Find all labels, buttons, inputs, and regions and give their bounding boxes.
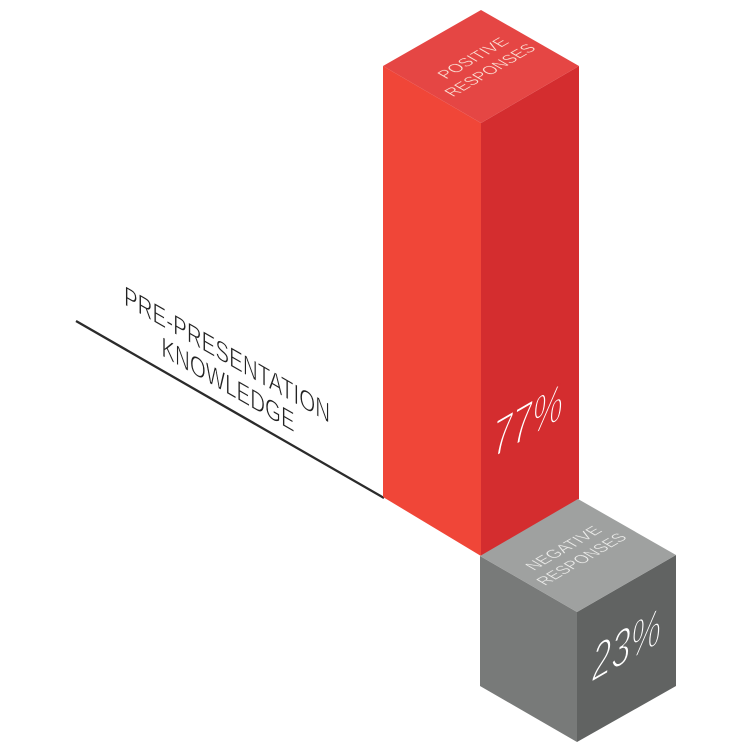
top face (383, 10, 579, 123)
axis line (76, 321, 384, 498)
label: negative responses: RESPONSES (532, 530, 632, 588)
cube: negative responses 23% (480, 499, 676, 742)
axis label: pre-presentation knowledge: KNOWLEDGE (161, 330, 295, 439)
bar: positive responses 77% (383, 10, 579, 556)
axis label: pre-presentation knowledge: PRE-PRESENTATION (124, 279, 330, 430)
value: 23%: 23% (591, 596, 661, 693)
right face (577, 555, 676, 742)
label: positive responses: POSITIVE (433, 35, 514, 82)
left face (383, 66, 481, 556)
label: positive responses: RESPONSES (440, 41, 540, 99)
top face (480, 499, 676, 612)
label: negative responses: NEGATIVE (521, 523, 607, 573)
right face (481, 66, 579, 556)
left face (480, 556, 577, 742)
value: 77%: 77% (493, 371, 563, 469)
